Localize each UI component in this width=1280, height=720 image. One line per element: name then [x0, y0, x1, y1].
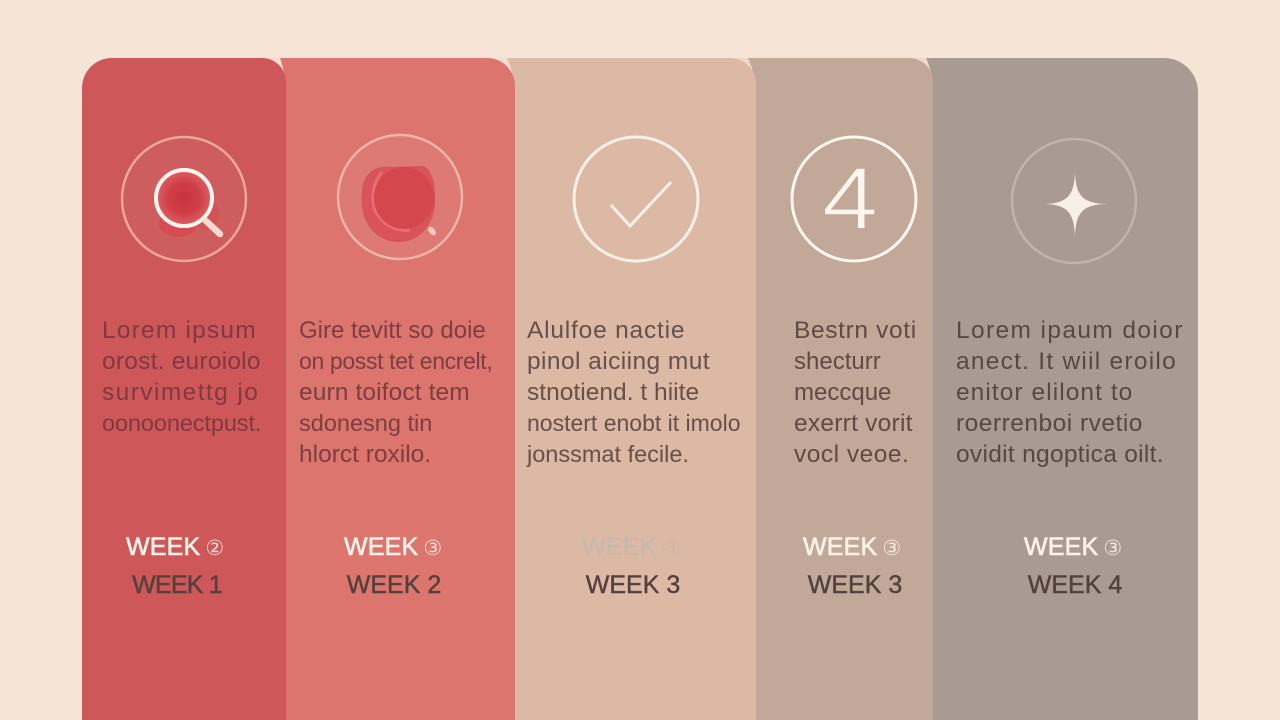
label: week 4 dark: WEEK 4 — [1028, 571, 1122, 599]
panel: column 3 — [495, 58, 756, 720]
text: column 1: orost. euroiolo — [102, 348, 261, 375]
text: column 3: stnotiend. t hiite — [527, 379, 699, 406]
label: week 2: WEEK③ — [344, 533, 442, 561]
text: column 3: nostert enobt it imolo — [527, 410, 741, 436]
text: column 1: survimettg jo — [102, 379, 259, 406]
icon: number four — [790, 136, 918, 262]
label: week 2 dark: WEEK 2 — [347, 571, 441, 599]
text: 4 — [822, 150, 878, 248]
text: column 4: shecturr — [794, 348, 881, 375]
icon: red circle — [336, 134, 464, 260]
text: column 5: roerrenboi rvetio — [956, 410, 1143, 437]
icon: sparkle — [1010, 138, 1138, 264]
text: column 3: jonssmat fecile. — [527, 441, 689, 467]
panel: column 1 — [82, 58, 286, 720]
text: column 2: sdonesng tin — [299, 410, 432, 436]
label: week 3 second: WEEK③ — [803, 533, 901, 561]
text: column 4: meccque — [794, 379, 891, 406]
label: week 3 dark: WEEK 3 — [586, 571, 680, 599]
text: column 2: eurn toifoct tem — [299, 379, 470, 406]
text: column 5: enitor elilont to — [956, 379, 1133, 406]
text: column 1: oonoonectpust. — [102, 410, 261, 436]
text: column 4 — [794, 317, 917, 468]
text: column 5: Lorem ipaum doior — [956, 317, 1184, 344]
label: week 3: WEEK③ — [582, 533, 680, 561]
icon: check mark — [572, 136, 700, 262]
text: column 1: Lorem ipsum — [102, 317, 257, 344]
label: week 3 second dark: WEEK 3 — [808, 571, 902, 599]
text: column 4: Bestrn voti — [794, 317, 917, 344]
panel: column 2 — [265, 58, 515, 720]
icon: magnifier — [120, 136, 248, 262]
text: column 5: anect. It wiil eroilo — [956, 348, 1177, 375]
text: column 3 — [526, 317, 741, 467]
text: column 4: vocl veoe. — [794, 441, 909, 468]
panel: column 5 — [915, 58, 1198, 720]
label: week 1: WEEK② — [126, 533, 224, 561]
text: column 2: Gire tevitt so doie — [299, 317, 486, 344]
text: column 2: hlorct roxilo. — [299, 441, 431, 468]
label: week 4: WEEK③ — [1024, 533, 1122, 561]
text: column 2 — [299, 317, 492, 468]
text: column 1 — [102, 317, 261, 436]
text: column 5 — [956, 317, 1184, 468]
text: column 3: Alulfoe nactie — [527, 317, 685, 344]
text: column 4: exerrt vorit — [794, 410, 913, 437]
label: week 1 dark: WEEK 1 — [132, 571, 222, 599]
text: column 5: ovidit ngoptica oilt. — [956, 441, 1164, 468]
panel: column 4 — [735, 58, 933, 720]
text: column 3: pinol aiciing mut — [527, 348, 710, 375]
text: column 2: on posst tet encrelt, — [299, 348, 492, 374]
